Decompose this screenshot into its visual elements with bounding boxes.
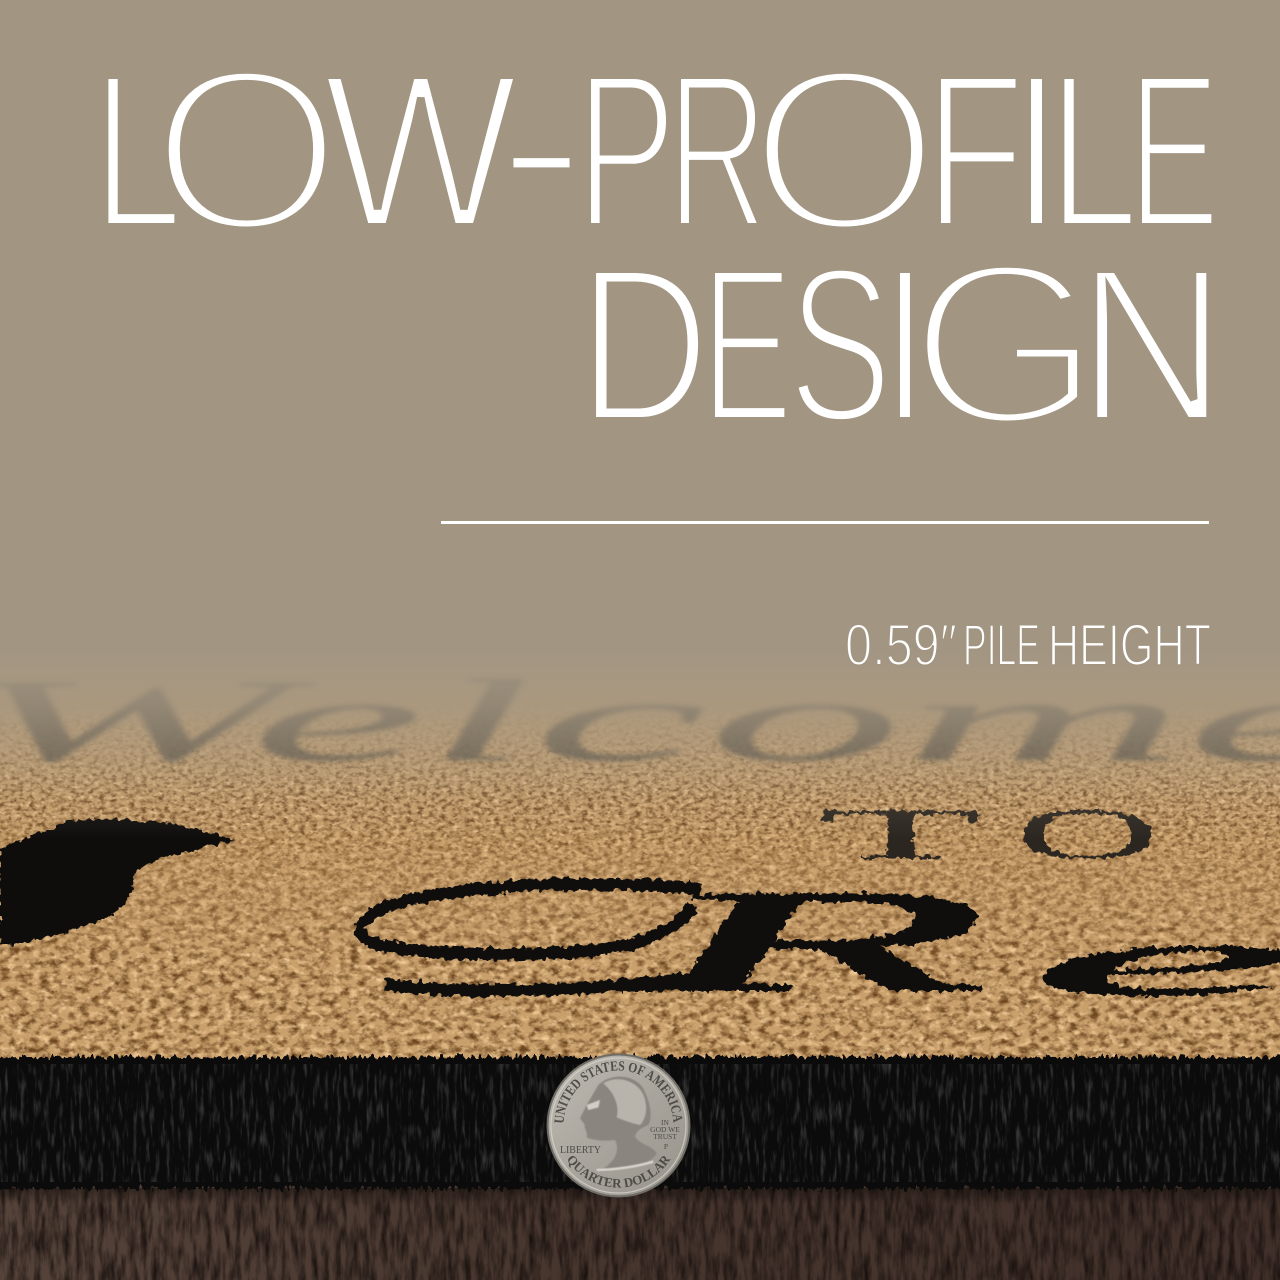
title line 1: L <box>92 28 183 275</box>
mat lettering: script name: R <box>636 860 990 1022</box>
title line 1: E <box>1128 27 1220 274</box>
subtitle: pile height: PILE <box>963 613 1040 678</box>
mat lettering: TO: O <box>1015 794 1160 874</box>
mat side edge: black pile <box>0 1057 1280 1189</box>
title line 2: N <box>1076 220 1227 468</box>
title line 1: - <box>497 22 586 269</box>
coin legend: Quarter Dollar: QUARTER DOLLAR <box>568 1156 671 1188</box>
title line 2 <box>578 214 1227 473</box>
title line 2: E <box>701 221 793 468</box>
background fade over distant mat <box>0 610 1280 840</box>
coin motto <box>650 1118 680 1151</box>
title line 2: D <box>578 222 710 469</box>
title line 2: I <box>881 222 929 469</box>
coin legend: Liberty: LIBERTY <box>560 1145 601 1156</box>
mat lettering: script name: e <box>1030 905 1280 1016</box>
background: taupe wall <box>0 0 1280 700</box>
title line 1: P <box>576 29 677 275</box>
coin motto: TRUST <box>653 1132 677 1141</box>
icon: US quarter coin for scale <box>546 1054 690 1198</box>
coin motto: GOD WE <box>650 1125 680 1134</box>
title line 1: L <box>1048 28 1139 275</box>
title line 1: W <box>322 28 519 274</box>
wood floor <box>0 1180 1280 1280</box>
title line 2: G <box>909 214 1102 473</box>
subtitle: pile height <box>845 613 1211 678</box>
mat motif: black silhouette <box>0 819 236 946</box>
title line 1: I <box>1010 26 1063 274</box>
mat lettering: script name <box>360 860 1280 1022</box>
coir doormat top surface <box>0 704 1280 1060</box>
title line 1: F <box>924 29 1025 275</box>
subtitle: pile height: 0.59″ <box>845 613 957 678</box>
subtitle: pile height: HEIGHT <box>1048 613 1211 678</box>
coin bust <box>580 1077 657 1172</box>
coin motto: P <box>664 1142 668 1151</box>
title <box>92 20 1227 473</box>
title line 1: O <box>749 20 940 280</box>
mat lettering: TO <box>818 794 1160 874</box>
mat lettering: TO: T <box>818 794 983 874</box>
title line 2: S <box>788 221 892 468</box>
title line 1: R <box>667 29 768 275</box>
divider rule <box>441 521 1209 524</box>
coin legend: United States of America: UNITED STATES OF AMERICA <box>554 1061 682 1123</box>
title line 1 <box>92 20 1220 280</box>
coin motto: IN <box>661 1118 670 1127</box>
title line 1: O <box>151 20 342 280</box>
